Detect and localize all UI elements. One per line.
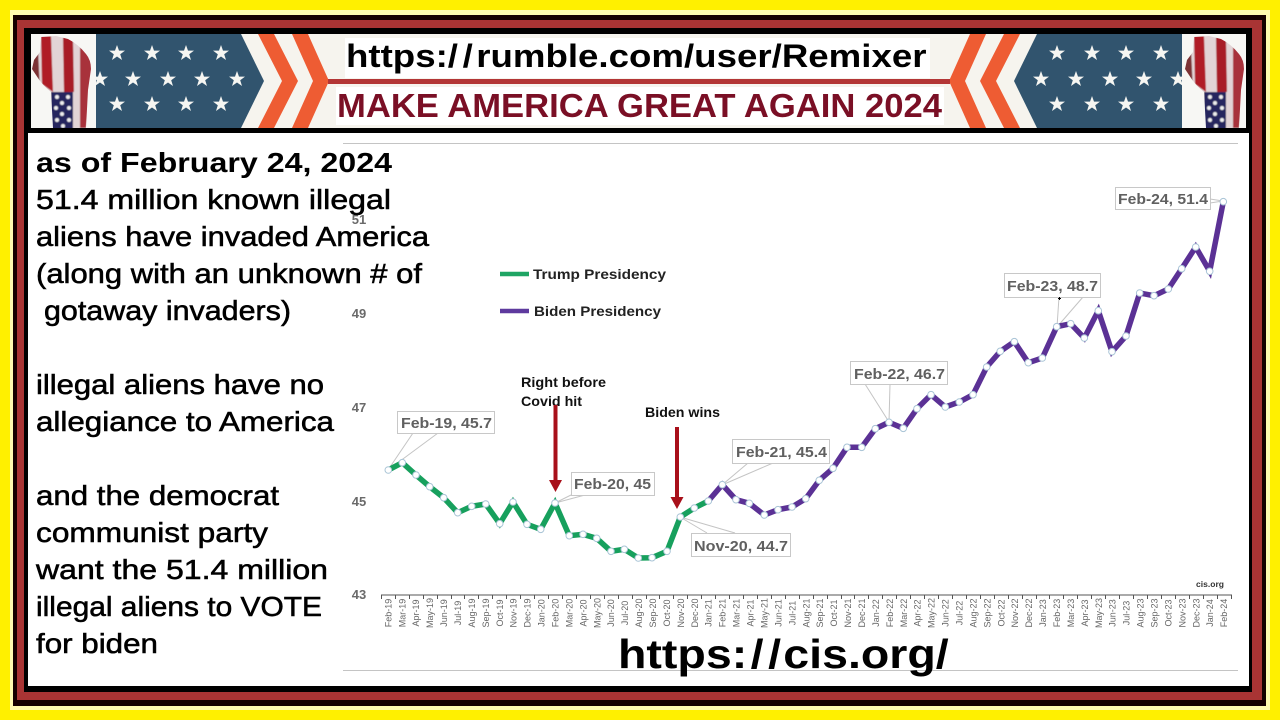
- callout: Feb-22: Feb-22, 46.7: [854, 366, 945, 383]
- banner divider line: [328, 79, 950, 84]
- left text block: [35, 147, 430, 659]
- chart panel: [343, 144, 1238, 670]
- x axis month labels: Jun-21: [773, 599, 783, 627]
- x axis month labels: May-21: [760, 598, 770, 628]
- callout: Feb-23: [1004, 274, 1100, 298]
- y axis labels: 51: [352, 212, 366, 227]
- x axis month labels: Feb-19: [383, 599, 393, 627]
- callout: Feb-24: [1116, 188, 1210, 210]
- left text block: for biden: [36, 628, 158, 659]
- callout: Feb-20: [572, 472, 654, 496]
- x axis month labels: Jan-20: [537, 599, 547, 627]
- banner url: https://rumble.com/user/Remixer: [346, 39, 927, 74]
- x axis month labels: Nov-20: [676, 598, 686, 628]
- x axis month labels: Nov-21: [843, 598, 853, 628]
- annotation: Right before Covid hit: [521, 374, 606, 409]
- callout: Feb-21: Feb-21, 45.4: [736, 444, 828, 461]
- left text block: aliens have invaded America: [36, 221, 430, 252]
- x axis month labels: May-22: [927, 598, 937, 628]
- callout: Feb-22: [850, 362, 948, 384]
- x axis month labels: Nov-23: [1177, 598, 1187, 628]
- content panel background: [28, 133, 1249, 686]
- x axis month labels: Dec-21: [857, 598, 867, 628]
- x axis month labels: Sep-22: [982, 598, 992, 628]
- x axis month labels: Jul-21: [787, 601, 797, 625]
- x axis month labels: Dec-20: [690, 598, 700, 628]
- x axis month labels: Oct-20: [662, 599, 672, 627]
- x axis month labels: Mar-23: [1066, 599, 1076, 627]
- x axis month labels: Apr-21: [746, 599, 756, 627]
- annotation: Right before Covid hit: Covid hit: [521, 393, 582, 409]
- y axis labels: [352, 212, 366, 602]
- x axis month labels: [383, 598, 1229, 628]
- x axis month labels: Jun-22: [941, 599, 951, 627]
- x axis month labels: Feb-20: [550, 599, 560, 627]
- callout: Feb-21: [732, 440, 830, 464]
- x axis month labels: Apr-20: [578, 599, 588, 627]
- y axis labels: 45: [352, 494, 366, 509]
- callout leader lines: [388, 199, 1223, 533]
- x axis month labels: Oct-21: [829, 599, 839, 627]
- x axis month labels: May-19: [425, 598, 435, 628]
- x axis with ticks: [381, 595, 1232, 599]
- x axis month labels: Apr-23: [1080, 599, 1090, 627]
- line series: Biden presidency: [708, 202, 1223, 515]
- left text block: (along with an unknown # of: [36, 258, 422, 289]
- icon: right flag fist: [1185, 36, 1244, 128]
- x axis month labels: Sep-19: [481, 598, 491, 628]
- x axis month labels: Nov-22: [1010, 598, 1020, 628]
- left text block: want the 51.4 million: [35, 554, 328, 585]
- x axis month labels: Mar-20: [564, 599, 574, 627]
- left text block: illegal aliens to VOTE: [36, 591, 322, 622]
- x axis month labels: Jun-19: [439, 599, 449, 627]
- banner slogan: MAKE AMERICA GREAT AGAIN 2024: [337, 87, 943, 124]
- callout: Feb-23: Feb-23, 48.7: [1007, 278, 1098, 295]
- x axis month labels: Dec-22: [1024, 598, 1034, 628]
- data point markers: [385, 198, 1227, 561]
- left text block: as of February 24, 2024: [36, 147, 393, 178]
- callout: Nov-20: Nov-20, 44.7: [694, 538, 788, 555]
- legend: [500, 266, 666, 319]
- callout: Feb-19: [398, 412, 494, 434]
- x axis month labels: Jul-19: [453, 601, 463, 625]
- x axis month labels: Aug-21: [801, 598, 811, 628]
- x axis month labels: Jan-23: [1038, 599, 1048, 627]
- x axis month labels: Mar-21: [732, 599, 742, 627]
- left text block: allegiance to America: [36, 406, 335, 437]
- arrow: Right before Covid hit: [549, 405, 562, 492]
- x axis month labels: Aug-19: [467, 598, 477, 628]
- callout: Nov-20: [692, 534, 790, 556]
- banner left navy star field: [92, 34, 264, 128]
- line series: Trump presidency: [388, 463, 708, 558]
- x axis month labels: Jun-23: [1108, 599, 1118, 627]
- x axis month labels: Jan-21: [704, 599, 714, 627]
- x axis month labels: Jan-24: [1205, 599, 1215, 627]
- x axis month labels: Feb-23: [1052, 599, 1062, 627]
- x axis month labels: Feb-24: [1219, 599, 1229, 627]
- x axis month labels: Oct-23: [1163, 599, 1173, 627]
- banner right navy star field: [1014, 34, 1186, 128]
- x axis month labels: Nov-19: [509, 598, 519, 628]
- cursor speck: [1058, 297, 1061, 300]
- x axis month labels: Feb-21: [718, 599, 728, 627]
- x axis month labels: Feb-22: [885, 599, 895, 627]
- banner left chevrons: [258, 34, 329, 128]
- arrow: Biden wins: [670, 427, 684, 509]
- x axis month labels: Sep-21: [815, 598, 825, 628]
- x axis month labels: May-23: [1094, 598, 1104, 628]
- x axis month labels: Mar-19: [397, 599, 407, 627]
- icon: left flag fist: [32, 36, 91, 128]
- x axis month labels: Dec-23: [1191, 598, 1201, 628]
- x axis month labels: Mar-22: [899, 599, 909, 627]
- x axis month labels: Sep-20: [648, 598, 658, 628]
- source url: https://cis.org/: [618, 632, 949, 677]
- x axis month labels: Sep-23: [1150, 598, 1160, 628]
- y axis labels: 47: [352, 400, 366, 415]
- banner: [30, 34, 1247, 130]
- left text block: gotaway invaders): [44, 295, 291, 326]
- left text block: 51.4 million known illegal: [36, 184, 391, 215]
- annotation: Right before Covid hit: Right before: [521, 374, 606, 390]
- x axis month labels: Apr-19: [411, 599, 421, 627]
- x axis month labels: May-20: [592, 598, 602, 628]
- left text block: illegal aliens have no: [36, 369, 324, 400]
- x axis month labels: Jul-22: [954, 601, 964, 625]
- left text block: and the democrat: [36, 480, 279, 511]
- legend: Biden Presidency: [534, 303, 661, 319]
- y axis labels: 43: [352, 587, 366, 602]
- callout: Feb-24: Feb-24, 51.4: [1118, 191, 1209, 208]
- x axis month labels: Jan-22: [871, 599, 881, 627]
- x axis month labels: Jun-20: [606, 599, 616, 627]
- x axis month labels: Aug-22: [968, 598, 978, 628]
- left text block: communist party: [36, 517, 268, 548]
- x axis month labels: Dec-19: [523, 598, 533, 628]
- legend: Trump Presidency: [533, 266, 666, 282]
- x axis month labels: Jul-20: [620, 601, 630, 625]
- source credit: cis.org: [1196, 579, 1224, 589]
- callout: Feb-20: Feb-20, 45: [574, 476, 651, 493]
- x axis month labels: Apr-22: [913, 599, 923, 627]
- y axis labels: 49: [352, 306, 366, 321]
- callout: Feb-19: Feb-19, 45.7: [401, 415, 492, 432]
- x axis month labels: Oct-22: [996, 599, 1006, 627]
- x axis month labels: Jul-23: [1122, 601, 1132, 625]
- x axis month labels: Aug-20: [634, 598, 644, 628]
- x axis month labels: Oct-19: [495, 599, 505, 627]
- annotation: Biden wins: Biden wins: [645, 404, 720, 420]
- banner right chevrons: [949, 34, 1020, 128]
- x axis month labels: Aug-23: [1136, 598, 1146, 628]
